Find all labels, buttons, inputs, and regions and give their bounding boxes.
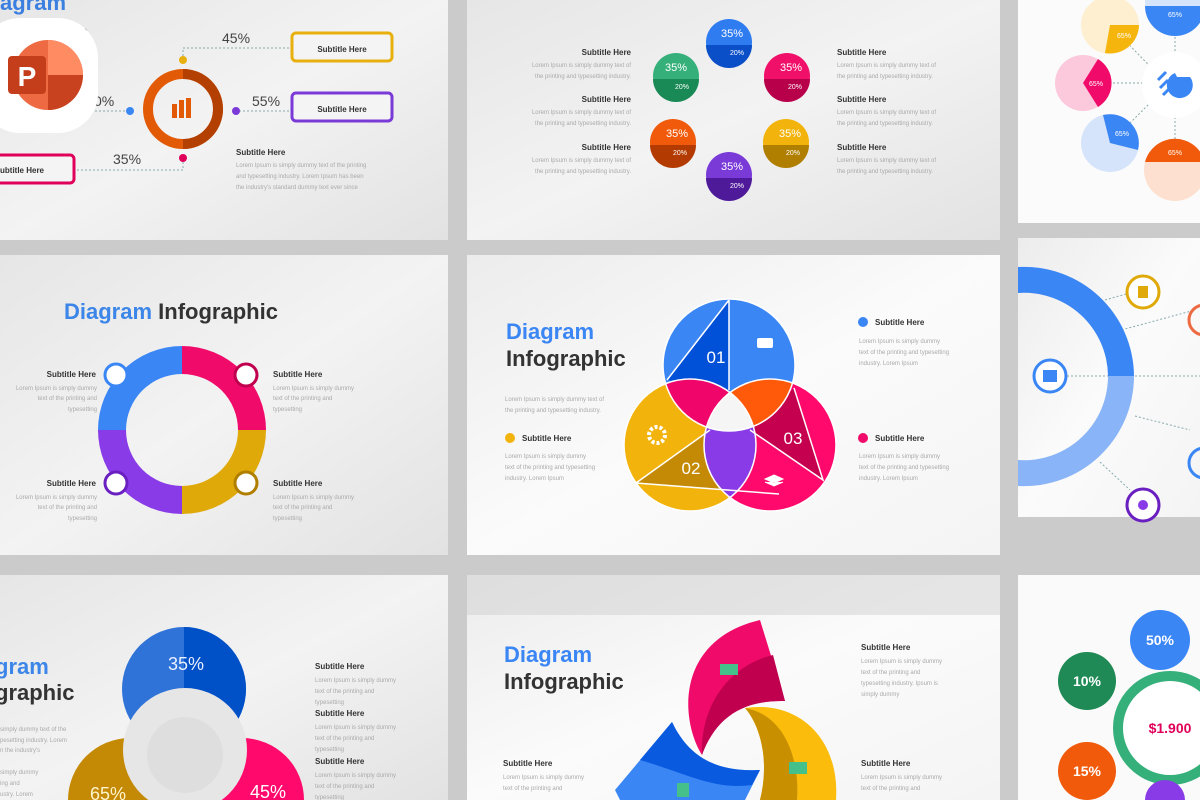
panel: bottom-middle slide: simply dummy — [861, 692, 899, 698]
panel: top-middle slide: Subtitle Here — [582, 95, 632, 104]
box: subtitle pink: ubtitle Here — [0, 166, 45, 175]
panel: bottom-left slide: simply dummy — [0, 770, 38, 776]
circles: percentages: 20% — [786, 150, 800, 157]
panel: bottom-left slide: typesetting — [315, 747, 344, 753]
panel: mid-left slide: Lorem Ipsum is simply dummy — [273, 386, 354, 392]
panel: top-middle slide: the printing and typesetting industry. — [535, 121, 631, 127]
venn circles — [68, 627, 304, 800]
panel: top-middle slide: the printing and typesetting industry. — [837, 121, 933, 127]
panel: bottom-middle slide: text of the printing and — [861, 670, 920, 676]
spiral segments — [615, 620, 836, 800]
panel: top-middle slide: Lorem Ipsum is simply dummy text of — [532, 110, 631, 116]
panel: top-left slide — [0, 0, 448, 240]
title — [506, 319, 626, 371]
panel: top-left slide: ic — [70, 20, 88, 45]
circles: percentages: 35% — [665, 62, 687, 74]
panel: bottom-middle slide: Infographic — [504, 669, 624, 694]
panel: top-right slide: 65% — [1089, 81, 1103, 88]
panel: top-middle slide: Subtitle Here — [837, 143, 887, 152]
panel: top-left slide: Lorem Ipsum is simply dummy text of the printing — [236, 163, 366, 169]
panel: top-right slide: 65% — [1168, 150, 1182, 157]
panel: top-middle slide: Lorem Ipsum is simply dummy text of — [532, 158, 631, 164]
panel: mid-left slide: text of the printing and — [273, 396, 332, 402]
panel: top-middle slide: the printing and typesetting industry. — [535, 74, 631, 80]
box: subtitle yellow — [292, 33, 392, 61]
panel: bottom-left slide — [0, 575, 448, 800]
panel: center slide: the printing and typesetting industry. — [505, 408, 601, 414]
legend: yellow: Subtitle Here — [522, 434, 572, 443]
panel: top-left slide: 0% — [94, 93, 114, 109]
panel: bottom-middle slide: Diagram — [504, 642, 592, 667]
circles: percentages: 20% — [675, 84, 689, 91]
panel: mid-left slide: Subtitle Here — [47, 370, 97, 379]
panel: mid-left slide: Subtitle Here — [273, 479, 323, 488]
venn diagram — [624, 299, 836, 511]
panel: mid-left slide: typesetting — [273, 516, 302, 522]
panel: top-middle slide: Subtitle Here — [582, 48, 632, 57]
panel: top-left slide: 35% — [113, 151, 141, 167]
legend: blue: Lorem Ipsum is simply dummy — [859, 339, 940, 345]
circles: percentages — [650, 19, 810, 201]
panel: mid-left slide: Subtitle Here — [47, 479, 97, 488]
box: subtitle purple: Subtitle Here — [317, 105, 367, 114]
panel: bottom-middle slide: Lorem Ipsum is simply dummy — [861, 659, 942, 665]
panel: mid-left slide: Lorem Ipsum is simply dummy — [273, 495, 354, 501]
venn circles: 35% — [168, 654, 204, 674]
panel: mid-left slide — [0, 255, 448, 555]
panel: bottom-left slide: Subtitle Here — [315, 757, 365, 766]
panel: top-middle slide: Subtitle Here — [837, 95, 887, 104]
panel: top-left slide: 55% — [252, 93, 280, 109]
panel: bottom-right slide — [1018, 575, 1200, 800]
legend: pink: Lorem Ipsum is simply dummy — [859, 454, 940, 460]
panel: bottom-left slide: ing and — [0, 781, 20, 787]
circles: percentages: 35% — [666, 128, 688, 140]
circles: percentages: 20% — [730, 50, 744, 57]
panel: bottom-middle slide: Subtitle Here — [861, 759, 911, 768]
title: Diagram Infographic — [64, 299, 278, 324]
panel: top-right slide: 65% — [1117, 33, 1131, 40]
panel: bottom-left slide: text of the printing and — [315, 689, 374, 695]
panel: top-left slide: 45% — [222, 30, 250, 46]
panel: top-middle slide: Lorem Ipsum is simply dummy text of — [837, 158, 936, 164]
box: subtitle yellow: Subtitle Here — [317, 45, 367, 54]
icon: pie chart — [1142, 52, 1200, 118]
legend: yellow: text of the printing and typesetting — [505, 465, 595, 471]
icon: powerpoint — [0, 18, 98, 133]
panel: mid-left slide: typesetting — [273, 407, 302, 413]
panel: bottom-left slide: Lorem Ipsum is simply dummy — [315, 678, 396, 684]
panel: top-middle slide: Lorem Ipsum is simply dummy text of — [837, 63, 936, 69]
circles: percentages: 20% — [730, 183, 744, 190]
panel: bottom-right slide: 10% — [1073, 673, 1102, 689]
panel: top-right slide: 65% — [1115, 131, 1129, 138]
panel: top-left slide: and typesetting industry. Lorem Ipsum has been — [236, 174, 364, 180]
panel: mid-right slide — [1018, 238, 1200, 521]
panel: top-middle slide: Lorem Ipsum is simply dummy text of — [532, 63, 631, 69]
legend: yellow — [505, 433, 595, 482]
panel: bottom-middle slide: Lorem Ipsum is simply dummy — [861, 775, 942, 781]
circles: percentages: 35% — [721, 28, 743, 40]
panel: mid-left slide: text of the printing and — [38, 505, 97, 511]
panel: bottom-middle slide: typesetting industry. Ipsum is — [861, 681, 938, 687]
panel: mid-left slide: text of the printing and — [273, 505, 332, 511]
legend: pink: text of the printing and typesetting — [859, 465, 949, 471]
panel: top-middle slide: the printing and typesetting industry. — [837, 74, 933, 80]
legend: pink: Subtitle Here — [875, 434, 925, 443]
donut chart — [148, 74, 218, 144]
panel: bottom-middle slide — [467, 575, 1000, 800]
panel: mid-left slide: Lorem Ipsum is simply dummy — [16, 386, 97, 392]
panel: bottom-middle slide: Subtitle Here — [861, 643, 911, 652]
panel: top-right slide: 65% — [1168, 12, 1182, 19]
legend: blue: industry. Lorem Ipsum — [859, 361, 918, 367]
legend: blue: Subtitle Here — [875, 318, 925, 327]
legend: blue — [858, 317, 949, 367]
panel: mid-left slide: text of the printing and — [38, 396, 97, 402]
venn diagram: 02 — [682, 459, 700, 478]
panel: top-left slide: Subtitle Here — [236, 148, 286, 157]
circles: percentages: 20% — [788, 84, 802, 91]
panel: bottom-left slide: Subtitle Here — [315, 662, 365, 671]
legend: pink — [858, 433, 949, 482]
panel: center slide: Lorem Ipsum is simply dummy text of — [505, 397, 604, 403]
panel: bottom-right slide: $1.900 — [1149, 720, 1192, 736]
panel: top-left slide: the industry's standard dummy text ever since — [236, 185, 359, 191]
panel: bottom-left slide: pesetting industry. Lorem — [0, 738, 67, 744]
panel: top-middle slide: the printing and typesetting industry. — [837, 169, 933, 175]
panel: bottom-left slide: ustry. Lorem — [0, 792, 33, 798]
panel: top-middle slide: Lorem Ipsum is simply dummy text of — [837, 110, 936, 116]
legend: blue: text of the printing and typesetting — [859, 350, 949, 356]
legend: pink: industry. Lorem Ipsum — [859, 476, 918, 482]
panel: bottom-middle slide: Lorem Ipsum is simply dummy — [503, 775, 584, 781]
panel: bottom-left slide: Lorem Ipsum is simply dummy — [315, 725, 396, 731]
panel: bottom-middle slide: Subtitle Here — [503, 759, 553, 768]
icon: powerpoint: P — [18, 61, 36, 92]
panel: bottom-middle slide: text of the printing and — [503, 786, 562, 792]
circles: percentages: 35% — [721, 161, 743, 173]
panel: bottom-middle slide: text of the printing and — [861, 786, 920, 792]
panel: bottom-left slide: simply dummy text of the — [0, 727, 67, 733]
panel: bottom-left slide: Subtitle Here — [315, 709, 365, 718]
panel: top-middle slide: Subtitle Here — [582, 143, 632, 152]
panel: mid-left slide: Subtitle Here — [273, 370, 323, 379]
panel: bottom-right slide: 50% — [1146, 632, 1175, 648]
panel: bottom-left slide: text of the printing and — [315, 784, 374, 790]
legend: yellow: Lorem Ipsum is simply dummy — [505, 454, 586, 460]
ring — [1018, 267, 1134, 376]
legend: yellow: industry. Lorem Ipsum — [505, 476, 564, 482]
venn diagram: 03 — [784, 429, 802, 448]
panel: bottom-left slide: typesetting — [315, 700, 344, 706]
panel: top-right slide — [1018, 0, 1200, 223]
circles: percentages: 20% — [673, 150, 687, 157]
panel: top-middle slide: the printing and typesetting industry. — [535, 169, 631, 175]
panel: mid-left slide: Lorem Ipsum is simply dummy — [16, 495, 97, 501]
title: Infographic — [506, 346, 626, 371]
panel: mid-left slide: typesetting — [68, 407, 97, 413]
panel: bottom-left slide: n the industry's — [0, 748, 40, 754]
box: subtitle pink — [0, 155, 74, 183]
circles: percentages: 35% — [780, 62, 802, 74]
donut — [98, 346, 266, 514]
panel: mid-left slide: typesetting — [68, 516, 97, 522]
panel: center slide — [467, 255, 1000, 555]
panel: bottom-left slide: text of the printing and — [315, 736, 374, 742]
panel: bottom-left slide: Lorem Ipsum is simply dummy — [315, 773, 396, 779]
circles: percentages: 35% — [779, 128, 801, 140]
panel: bottom-right slide: 15% — [1073, 763, 1102, 779]
title: Diagram — [506, 319, 594, 344]
venn diagram: 01 — [707, 348, 725, 367]
box: subtitle purple — [292, 93, 392, 121]
panel: top-middle slide: Subtitle Here — [837, 48, 887, 57]
panel: top-middle slide — [467, 0, 1000, 240]
